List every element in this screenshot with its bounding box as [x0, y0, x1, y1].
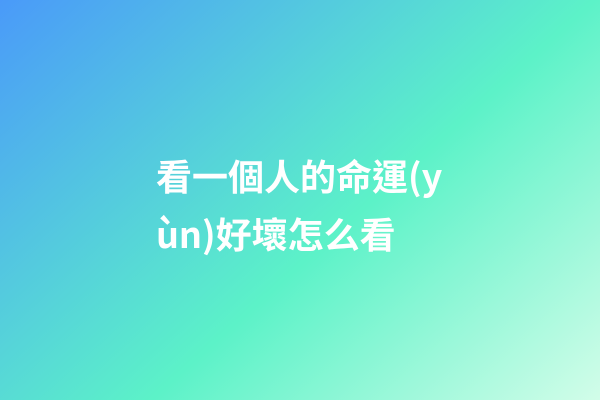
title: 看一個人的命運(y — [156, 149, 442, 201]
title — [156, 149, 442, 259]
title: ùn)好壞怎么看 — [156, 207, 396, 259]
